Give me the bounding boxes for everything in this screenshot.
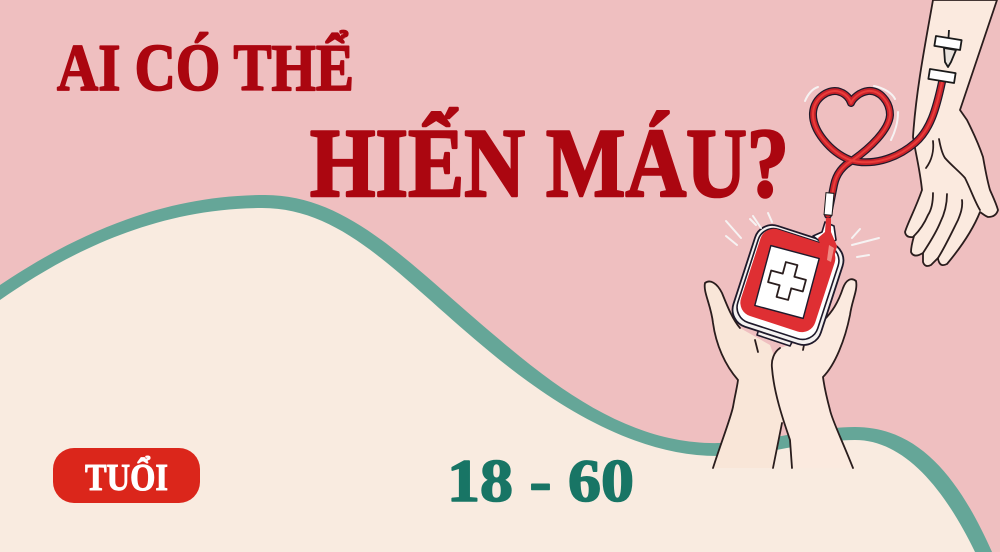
illustration: right hand holding the bag: [772, 279, 856, 468]
heading: AI CÓ THỂ: AI CÓ THỂ: [57, 29, 354, 105]
illustration: blood bag: [728, 218, 848, 350]
illustration: donor arm and hand: [905, 0, 998, 266]
illustration: needle and tape on arm: [928, 30, 962, 83]
age range value: 18 - 60: [447, 448, 634, 514]
illustration: motion sparks around bag: [726, 213, 879, 257]
illustration: blood tube forming a heart: [813, 82, 942, 215]
illustration: white tube clamp: [824, 193, 834, 215]
label pill: TUỔI: [53, 448, 200, 503]
illustration: left hand holding the bag: [705, 281, 790, 468]
cream wave panel: [0, 208, 975, 552]
label pill: TUỔI: TUỔI: [85, 456, 168, 499]
teal wave band: [0, 195, 992, 552]
illustration: motion sparks around heart: [805, 86, 898, 140]
heading: HIẾN MÁU?: HIẾN MÁU?: [310, 107, 789, 218]
